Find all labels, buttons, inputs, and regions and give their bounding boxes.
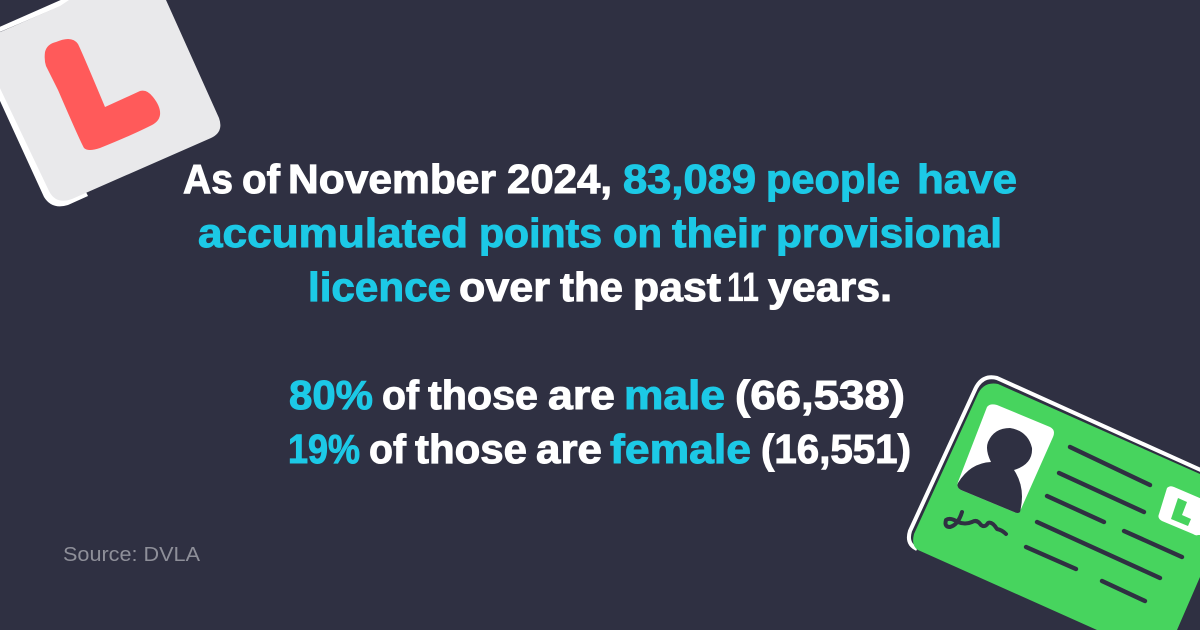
headline text: have [917, 156, 1017, 202]
statistics text: of [369, 426, 406, 472]
signature [946, 512, 1006, 534]
statistics text: (66,538) [735, 372, 905, 418]
silhouette [957, 428, 1032, 513]
icon: L plate [0, 0, 220, 206]
headline text: licence [308, 264, 451, 310]
statistics text: those [415, 426, 527, 472]
headline text: November [288, 156, 496, 202]
headline text: people [766, 156, 900, 202]
headline text: 83,089 [623, 156, 756, 202]
statistics text: male [624, 372, 725, 418]
text lines [1026, 447, 1182, 601]
portrait photo [957, 404, 1054, 513]
headline text: past [633, 264, 721, 310]
statistics text: (16,551) [761, 426, 911, 472]
mini L badge [1158, 486, 1200, 535]
icon: green driving licence card [909, 377, 1200, 630]
headline text: 2024, [507, 156, 612, 202]
headline text: provisional [776, 210, 1002, 256]
headline text: the [560, 264, 623, 310]
statistics text [288, 372, 911, 472]
statistics text: 19% [288, 426, 360, 472]
headline text: their [672, 210, 766, 256]
statistics text: of [382, 372, 419, 418]
statistics text: those [428, 372, 538, 418]
headline text: over [459, 264, 550, 310]
headline text: years. [768, 264, 892, 310]
L letter [45, 39, 160, 150]
headline text: accumulated [198, 210, 468, 256]
headline text: As [183, 156, 233, 202]
headline text: points [479, 210, 602, 256]
statistics text: are [548, 372, 615, 418]
statistics text: female [610, 426, 751, 472]
source: Source: DVLA [63, 544, 201, 566]
statistics text: 80% [289, 372, 373, 418]
statistics text: are [536, 426, 602, 472]
headline text: 11 [727, 264, 759, 310]
headline text: on [613, 210, 662, 256]
headline text: of [242, 156, 280, 202]
headline text [183, 156, 1017, 310]
